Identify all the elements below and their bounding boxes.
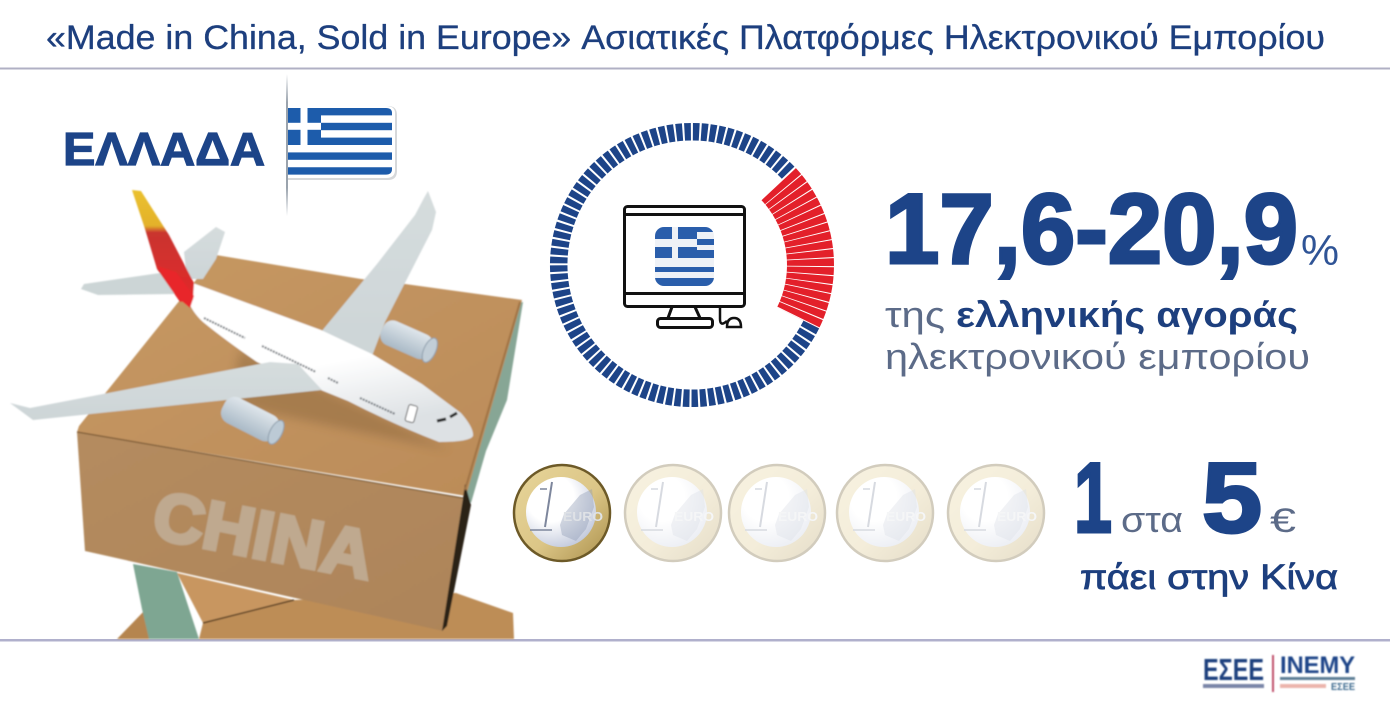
stat: one in five euros: πάει στην Κίνα <box>1080 558 1338 597</box>
far engine <box>377 317 441 364</box>
chart: ring gauge of Chinese platform share <box>559 132 811 398</box>
text: market description: της <box>885 294 945 335</box>
lower boxes <box>117 564 514 639</box>
near engine <box>217 393 288 447</box>
title: «Made in China, Sold in Europe» Ασιατικές Πλατφόρμες Ηλεκτρονικού Εμπορίου <box>46 19 1325 57</box>
airplane <box>10 190 473 447</box>
text: market description: ελληνικής αγοράς <box>956 294 1298 335</box>
logos: ESEE and INEMY <box>1203 652 1355 693</box>
logos: ESEE and INEMY: INEMY <box>1280 652 1355 679</box>
stat: one in five euros: € <box>1270 502 1296 540</box>
plane shadow <box>230 350 450 450</box>
text: market description: ηλεκτρονικού εμπορίου <box>885 336 1310 377</box>
heading: country: ΕΛΛΑΔΑ <box>63 123 265 175</box>
icon: small flag <box>655 227 714 286</box>
coins: faded <box>624 464 1045 562</box>
stat: one in five euros <box>1074 442 1338 597</box>
coin: highlighted <box>513 464 611 562</box>
stat: one in five euros: 5 <box>1202 442 1262 553</box>
icon: monitor with Greek flag <box>624 206 745 328</box>
main box <box>77 255 523 631</box>
box label: CHINA <box>147 477 380 594</box>
icon row: one euro coins <box>513 464 1045 562</box>
icon: Greek flag <box>286 74 397 216</box>
logos: ESEE and INEMY: ΕΣΕΕ <box>1331 682 1355 693</box>
stat: one in five euros: 1 <box>1074 442 1112 553</box>
stat: one in five euros: στα <box>1121 499 1183 540</box>
logos: ESEE and INEMY: ΕΣΕΕ <box>1203 652 1264 687</box>
stat: percentage: 17,6-20,9 <box>885 173 1298 284</box>
illustration: cardboard boxes and airplane <box>10 190 523 639</box>
text: market description <box>885 294 1310 377</box>
stat: percentage: % <box>1301 227 1339 275</box>
